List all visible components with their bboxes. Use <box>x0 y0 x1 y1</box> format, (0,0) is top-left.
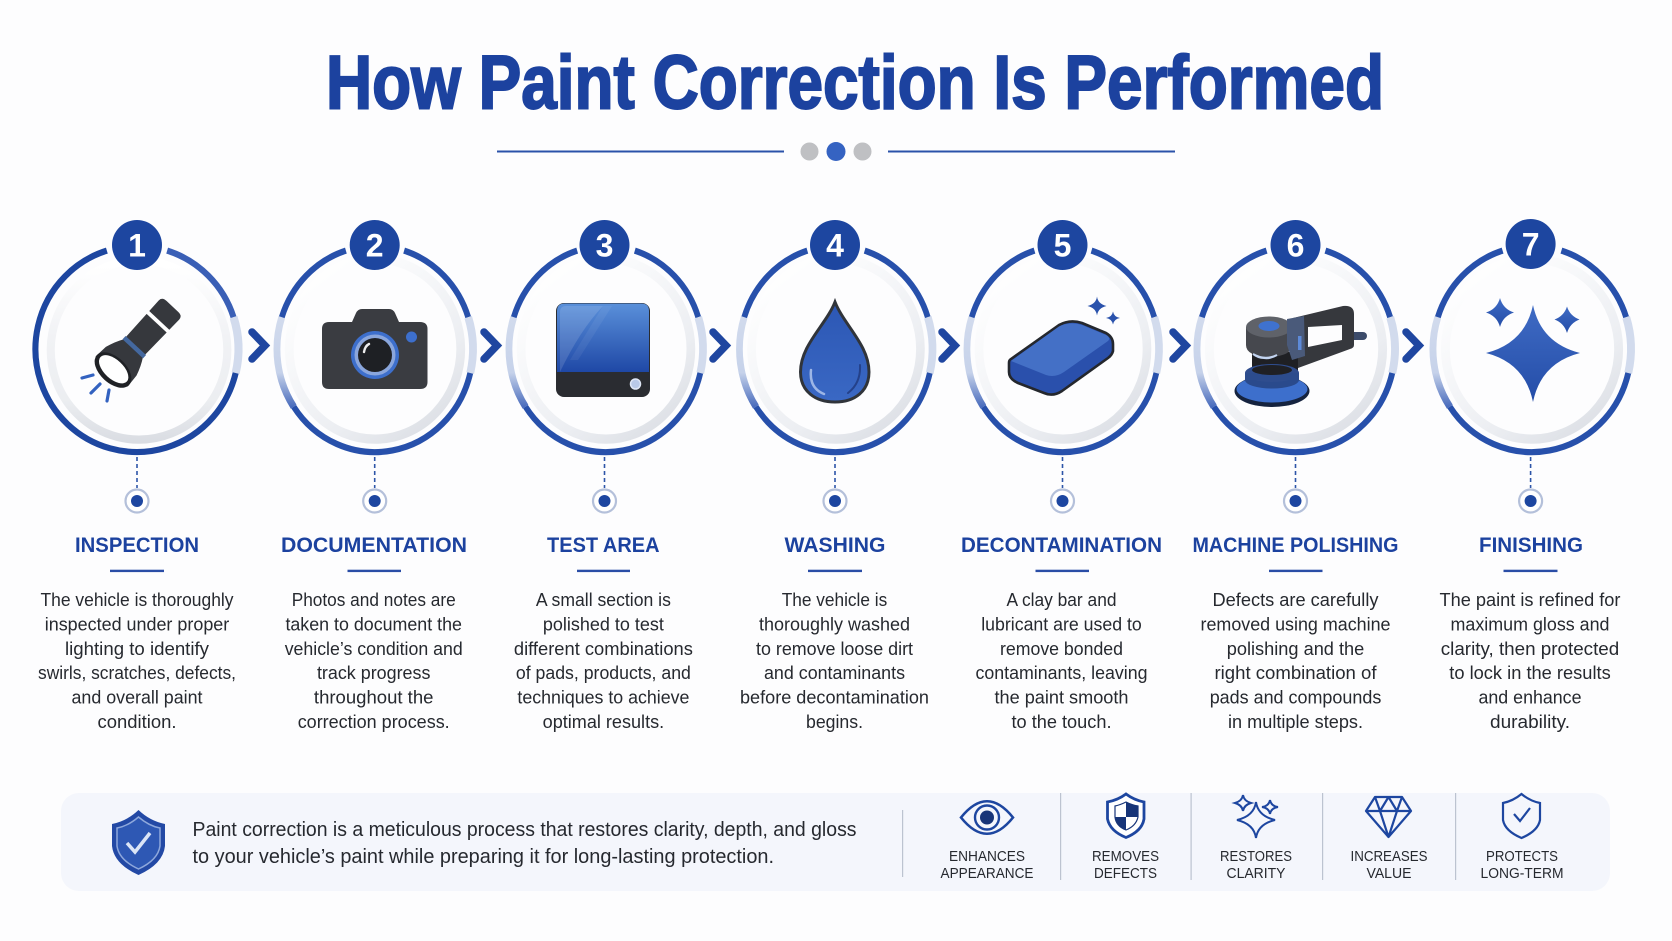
step 4: washing <box>739 220 932 732</box>
benefit: increases value: INCREASES <box>1350 849 1428 865</box>
description: contaminants, leaving <box>976 663 1148 683</box>
description <box>38 590 236 732</box>
benefit: protects long-term <box>1480 794 1564 882</box>
description: vehicle’s condition and <box>285 639 463 659</box>
description <box>740 590 929 732</box>
heading: TEST AREA <box>547 533 660 557</box>
description: in multiple steps. <box>1228 712 1363 732</box>
connector 2 <box>363 457 386 512</box>
step 3: test area <box>509 220 703 732</box>
title divider <box>497 142 1175 161</box>
description: polished to test <box>543 614 664 634</box>
number badge 4: 4 <box>826 228 844 264</box>
number badge 5 <box>1038 220 1088 270</box>
icon: machine polisher <box>1234 306 1367 407</box>
summary text: Paint correction is a meticulous process that restores clarity, depth, and gloss <box>192 819 856 841</box>
heading: FINISHING <box>1479 533 1583 557</box>
step 2: documentation <box>277 220 473 732</box>
summary text: to your vehicle’s paint while preparing it for long-lasting protection. <box>192 846 774 868</box>
benefit: protects long-term: PROTECTS <box>1486 849 1558 865</box>
description: The paint is refined for <box>1440 590 1620 610</box>
title: How Paint Correction Is Performed <box>326 40 1384 126</box>
number badge 2: 2 <box>366 228 384 264</box>
number badge 5: 5 <box>1054 228 1071 264</box>
description: polishing and the <box>1227 639 1364 659</box>
description <box>514 590 693 732</box>
benefit: removes defects: REMOVES <box>1092 849 1159 865</box>
description: swirls, scratches, defects, <box>38 663 236 683</box>
arrow 5 <box>1173 332 1186 359</box>
description <box>976 590 1148 732</box>
number badge 2 <box>350 220 400 270</box>
description: to the touch. <box>1012 712 1112 732</box>
ring 4 <box>739 251 932 452</box>
benefit: protects long-term: LONG-TERM <box>1480 866 1564 882</box>
heading: DECONTAMINATION <box>961 533 1162 557</box>
description: condition. <box>98 712 176 732</box>
connector 4 <box>824 457 846 512</box>
connector 3 <box>593 457 616 512</box>
number badge 3: 3 <box>596 228 613 264</box>
step 5: decontamination <box>961 220 1162 732</box>
icon: shield with check <box>112 810 165 875</box>
number badge 7 <box>1506 219 1556 269</box>
heading: DOCUMENTATION <box>281 533 467 557</box>
ring 3 <box>509 251 703 452</box>
arrow 1 <box>252 332 265 359</box>
arrow 2 <box>484 332 497 359</box>
description: taken to document the <box>285 614 462 634</box>
description: throughout the <box>314 688 433 708</box>
number badge 7: 7 <box>1522 226 1539 262</box>
description: inspected under proper <box>45 614 229 634</box>
description: lubricant are used to <box>981 614 1142 634</box>
arrow 3 <box>713 332 726 359</box>
description: and contaminants <box>764 663 905 683</box>
benefit: enhances appearance: APPEARANCE <box>940 866 1034 882</box>
step 7: finishing <box>1433 219 1631 732</box>
benefit: restores clarity <box>1220 795 1292 882</box>
description: right combination of <box>1214 663 1378 683</box>
description: The vehicle is <box>782 590 887 610</box>
summary text <box>192 819 856 868</box>
number badge 3 <box>580 220 630 270</box>
description: clarity, then protected <box>1441 639 1619 659</box>
description: thoroughly washed <box>759 614 910 634</box>
description: and overall paint <box>72 688 202 708</box>
description: pads and compounds <box>1210 688 1381 708</box>
number badge 1: 1 <box>128 228 146 264</box>
description <box>1440 590 1620 732</box>
icon: test panel <box>556 303 650 397</box>
description: optimal results. <box>543 712 664 732</box>
ring 6 <box>1197 251 1395 452</box>
description: maximum gloss and <box>1450 614 1610 634</box>
heading: WASHING <box>784 533 886 557</box>
description: the paint smooth <box>994 688 1128 708</box>
description: lighting to identify <box>65 639 209 659</box>
icon: camera <box>322 309 428 389</box>
description: of pads, products, and <box>516 663 691 683</box>
description: A small section is <box>536 590 671 610</box>
icon: sparkles <box>1486 298 1580 402</box>
description: track progress <box>317 663 430 683</box>
benefit: increases value <box>1350 797 1428 882</box>
number badge 4 <box>810 220 860 270</box>
icon: clay bar <box>1009 321 1113 395</box>
icon: clay sparkles <box>1088 296 1120 324</box>
benefit: removes defects: DEFECTS <box>1094 866 1157 882</box>
ring 5 <box>967 251 1159 452</box>
ring 7 <box>1433 251 1631 452</box>
description: to remove loose dirt <box>756 639 913 659</box>
arrow 4 <box>942 332 955 359</box>
benefit: removes defects <box>1092 794 1159 882</box>
icon: water drop <box>800 302 869 402</box>
description: removed using machine <box>1200 614 1390 634</box>
description: correction process. <box>298 712 450 732</box>
description: different combinations <box>514 639 693 659</box>
benefit: enhances appearance: ENHANCES <box>949 849 1025 865</box>
description: The vehicle is thoroughly <box>40 590 234 610</box>
description: begins. <box>806 712 863 732</box>
description <box>1200 590 1390 732</box>
arrow 6 <box>1406 332 1419 359</box>
benefit: restores clarity: RESTORES <box>1220 849 1292 865</box>
benefit: enhances appearance <box>940 801 1034 882</box>
description: before decontamination <box>740 688 929 708</box>
description: techniques to achieve <box>517 688 689 708</box>
number badge 6: 6 <box>1287 228 1304 264</box>
step 6: machine polishing <box>1192 220 1398 732</box>
description: and enhance <box>1478 688 1582 708</box>
description <box>285 590 463 732</box>
connector 5 <box>1051 457 1074 512</box>
panel: summary and benefits <box>61 793 1610 891</box>
benefit: increases value: VALUE <box>1366 866 1412 882</box>
description: durability. <box>1490 712 1570 732</box>
description: Defects are carefully <box>1212 590 1378 610</box>
description: remove bonded <box>1000 639 1123 659</box>
heading: MACHINE POLISHING <box>1192 533 1398 557</box>
connector 6 <box>1284 457 1307 512</box>
heading: INSPECTION <box>75 533 199 557</box>
description: Photos and notes are <box>292 590 456 610</box>
description: A clay bar and <box>1006 590 1116 610</box>
ring 2 <box>277 251 473 452</box>
number badge 1 <box>112 220 162 270</box>
benefit: restores clarity: CLARITY <box>1226 866 1286 882</box>
connector 1 <box>126 457 148 512</box>
icon: flashlight <box>82 291 188 401</box>
ring 1 <box>35 251 238 452</box>
connector 7 <box>1519 457 1542 512</box>
step 1: inspection <box>35 220 238 732</box>
number badge 6 <box>1270 220 1320 270</box>
description: to lock in the results <box>1449 663 1611 683</box>
